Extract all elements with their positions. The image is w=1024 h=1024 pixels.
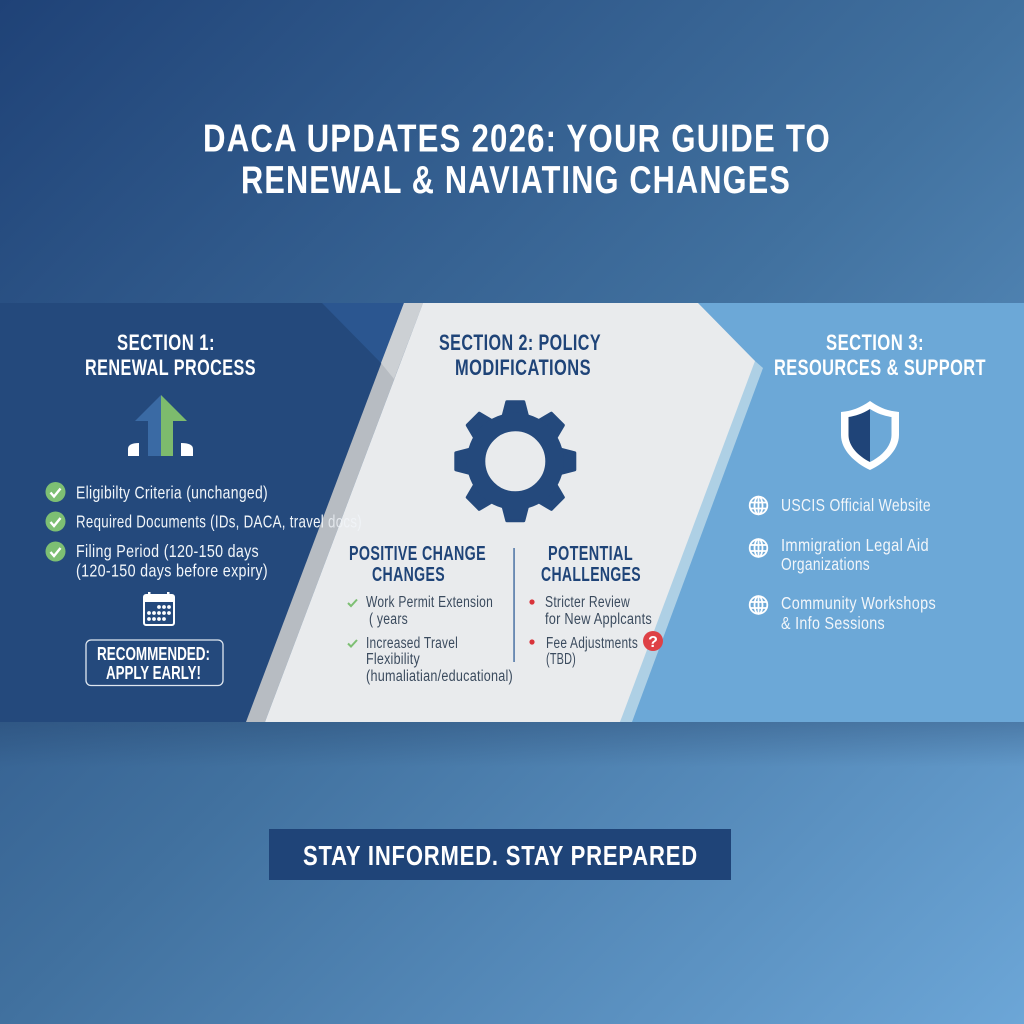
icon: check — [46, 542, 66, 562]
item: fee adjustments: (TBD) — [546, 651, 576, 668]
column: positive changes — [348, 543, 513, 685]
panel: section 2 policy background — [265, 303, 755, 722]
item: work permit — [366, 594, 493, 628]
panel: section 2 content — [348, 330, 663, 685]
icon: upward arrow — [128, 395, 193, 456]
column: potential challenges — [529, 543, 663, 668]
column divider — [513, 548, 515, 662]
positive changes heading: CHANGES — [372, 564, 445, 586]
icon: check — [46, 482, 66, 502]
item: stricter review: Stricter Review — [545, 594, 630, 611]
challenges heading — [541, 543, 641, 586]
item: filing period — [76, 541, 268, 580]
item: USCIS: USCIS Official Website — [781, 495, 931, 515]
icon: globe — [750, 497, 767, 514]
icon: check — [46, 512, 66, 532]
icon: red bullet — [529, 639, 535, 645]
icon: green check — [348, 640, 357, 646]
icon: red bullet — [529, 599, 535, 605]
item: workshops — [781, 593, 936, 633]
item: stricter review — [545, 594, 652, 628]
item: legal aid: Immigration Legal Aid — [781, 535, 929, 555]
item: workshops: & Info Sessions — [781, 613, 885, 633]
item: eligibility: Eligibilty Criteria (unchanged) — [76, 482, 268, 502]
title — [203, 118, 831, 202]
light upper part of grey strip — [381, 303, 423, 379]
footer banner — [269, 829, 731, 880]
item: required documents: Required Documents (IDs, DACA, travel docs) — [76, 512, 362, 532]
checklist — [46, 482, 362, 580]
icon: gear — [456, 402, 575, 521]
grey diagonal strip — [246, 303, 423, 722]
item: work permit: ( years — [369, 611, 408, 628]
panel: section 1 content — [46, 330, 362, 686]
positive changes heading — [349, 543, 486, 586]
panel shadow — [0, 722, 1024, 767]
panel: section 3 resources background — [600, 303, 1024, 722]
icon: shield — [841, 401, 899, 470]
item: workshops: Community Workshops — [781, 593, 936, 613]
item: fee adjustments — [546, 635, 638, 668]
title: DACA UPDATES 2026: YOUR GUIDE TO — [203, 118, 831, 160]
section 2 heading — [439, 330, 601, 380]
panel: section 3 content — [750, 330, 986, 633]
icon: red question mark: ? — [648, 634, 658, 651]
footer banner: STAY INFORMED. STAY PREPARED — [303, 840, 698, 871]
item: travel flexibility: Increased Travel — [366, 635, 458, 652]
item: fee adjustments: Fee Adjustments — [546, 635, 638, 652]
callout: apply early — [86, 640, 223, 686]
section 3 heading — [774, 330, 986, 380]
item: stricter review: for New Applcants — [545, 611, 652, 628]
panel: section 1 renewal background — [0, 303, 410, 722]
item: legal aid: Organizations — [781, 554, 870, 574]
section 2 heading: SECTION 2: POLICY — [439, 330, 601, 355]
positive changes heading: POSITIVE CHANGE — [349, 543, 486, 565]
challenges heading: CHALLENGES — [541, 564, 641, 586]
section 2 heading: MODIFICATIONS — [455, 355, 591, 380]
light blue diagonal strip — [620, 348, 763, 722]
section 1 heading: SECTION 1: — [117, 330, 215, 355]
item: travel flexibility: Flexibility — [366, 651, 420, 668]
item: work permit: Work Permit Extension — [366, 594, 493, 611]
icon: globe — [750, 596, 767, 614]
challenges heading: POTENTIAL — [548, 543, 633, 565]
callout: apply early: RECOMMENDED: — [97, 643, 210, 664]
item: filing period: (120-150 days before expiry) — [76, 560, 268, 580]
section 1 heading — [85, 330, 256, 380]
item: legal aid — [781, 535, 929, 574]
icon: green check — [348, 600, 357, 606]
icon: calendar — [144, 592, 174, 625]
section 3 heading: SECTION 3: — [826, 330, 924, 355]
title: RENEWAL & NAVIATING CHANGES — [241, 159, 791, 202]
item: travel flexibility: (humaliatian/educational) — [366, 668, 513, 685]
item: travel flexibility — [366, 635, 513, 685]
section 1 heading: RENEWAL PROCESS — [85, 355, 256, 380]
callout: apply early: APPLY EARLY! — [106, 662, 201, 683]
lighter corner facet — [322, 303, 408, 366]
item: filing period: Filing Period (120-150 days — [76, 541, 259, 561]
icon: globe — [750, 539, 767, 557]
